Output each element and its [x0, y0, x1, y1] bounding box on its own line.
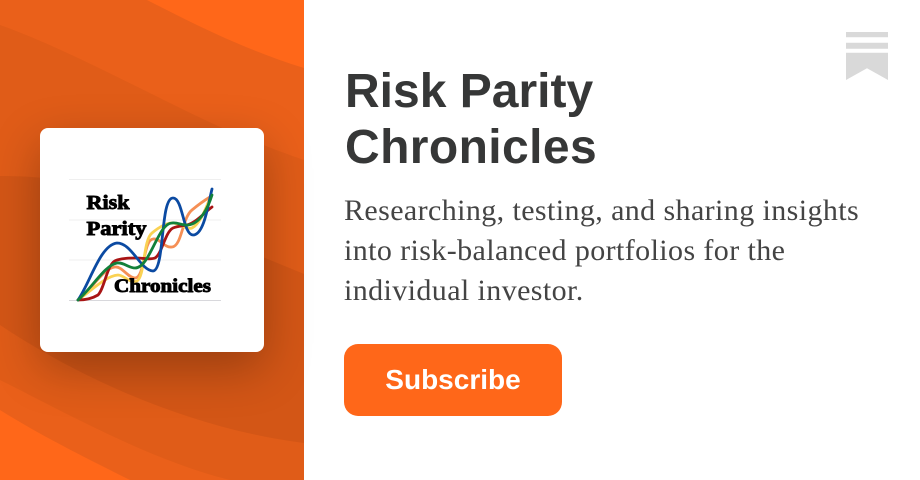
line: blue — [78, 189, 212, 300]
line: red — [78, 207, 212, 300]
line: orange — [78, 197, 210, 300]
logo text: Parity: Parity — [86, 218, 146, 240]
logo text: Risk: Risk — [86, 192, 130, 214]
line: green — [78, 195, 212, 300]
text block: description: Researching, testing, and sharing insights — [344, 194, 859, 227]
text block: description — [344, 194, 859, 307]
line: yellow — [78, 198, 210, 300]
panel: orange wave background — [0, 0, 304, 480]
heading: publication title: Risk Parity — [345, 65, 593, 118]
panel: logo card — [40, 128, 264, 352]
text block: description: into risk-balanced portfolios for the — [344, 234, 785, 267]
icon: bookmark — [846, 32, 888, 80]
text block: description: individual investor. — [344, 274, 584, 307]
card shadow — [40, 128, 264, 352]
chart: risk parity lines logo — [69, 179, 221, 302]
heading: publication title — [345, 65, 597, 174]
button: subscribe: Subscribe — [385, 364, 521, 395]
button: subscribe — [344, 344, 562, 416]
heading: publication title: Chronicles — [345, 121, 597, 174]
logo text: Chronicles: Chronicles — [114, 276, 211, 297]
